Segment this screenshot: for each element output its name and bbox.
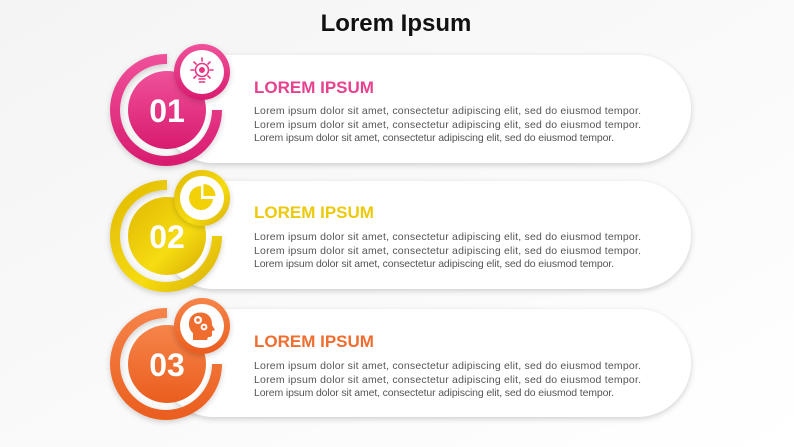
heading 01: LOREM IPSUM [254,78,374,97]
text block 02: Lorem ipsum dolor sit amet, consectetur adipiscing elit, sed do eiusmod tempor. [254,231,641,243]
pill card 02 [160,181,691,289]
heading 03: LOREM IPSUM [254,332,374,351]
text block 02 [254,231,641,270]
text block 01: Lorem ipsum dolor sit amet, consectetur adipiscing elit, sed do eiusmod tempor. [254,132,614,144]
text block 03: Lorem ipsum dolor sit amet, consectetur adipiscing elit, sed do eiusmod tempor. [254,360,641,372]
icon: lightbulb [174,44,230,100]
pill card 03 [160,309,691,417]
text block 03: Lorem ipsum dolor sit amet, consectetur adipiscing elit, sed do eiusmod tempor. [254,374,641,386]
panel: item 03 [110,298,691,420]
number badge 01 [110,54,222,166]
heading 02: LOREM IPSUM [254,203,374,222]
text block 01: Lorem ipsum dolor sit amet, consectetur adipiscing elit, sed do eiusmod tempor. [254,105,641,117]
text block 03 [254,360,641,399]
panel: item 02 [110,170,691,292]
text block 01: Lorem ipsum dolor sit amet, consectetur adipiscing elit, sed do eiusmod tempor. [254,119,641,131]
number badge 02: 02 [149,219,185,255]
pill card 01 [160,55,691,163]
icon: head with gears [174,298,230,354]
number badge 03: 03 [149,347,185,383]
text block 03: Lorem ipsum dolor sit amet, consectetur adipiscing elit, sed do eiusmod tempor. [254,387,614,399]
text block 02: Lorem ipsum dolor sit amet, consectetur adipiscing elit, sed do eiusmod tempor. [254,258,614,270]
icon: pie chart [174,170,230,226]
number badge 03 [110,308,222,420]
text block 01 [254,105,641,144]
panel: item 01 [110,44,691,166]
number badge 02 [110,180,222,292]
text block 02: Lorem ipsum dolor sit amet, consectetur adipiscing elit, sed do eiusmod tempor. [254,245,641,257]
number badge 01: 01 [149,93,185,129]
title: Lorem Ipsum [321,10,471,37]
